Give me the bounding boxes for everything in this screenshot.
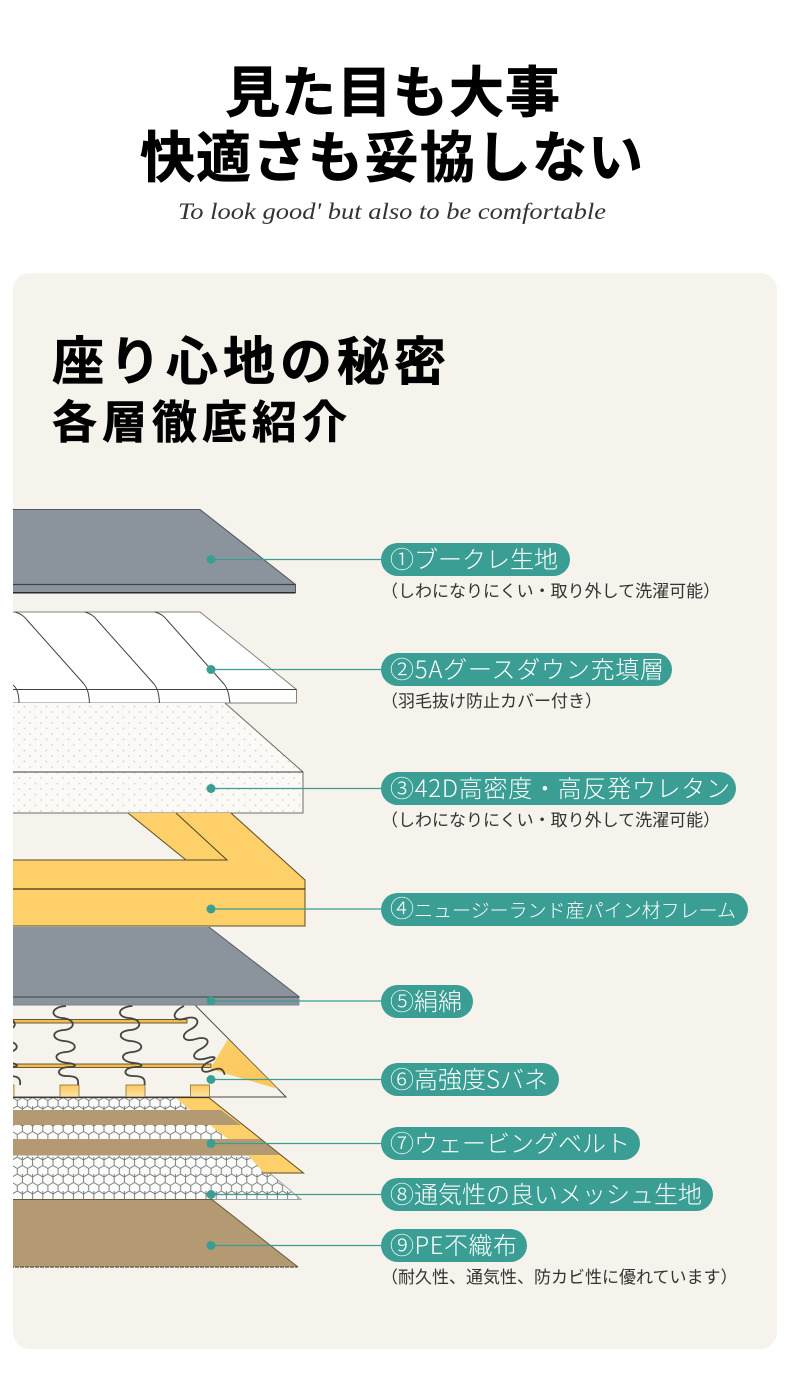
springs (0, 1001, 225, 1085)
callout 5 (206, 982, 473, 1018)
callout 9: ⑨PE不織布 (390, 1226, 517, 1261)
callout 5: ⑤絹綿 (390, 982, 462, 1017)
title (140, 62, 644, 189)
callout 2: （羽毛抜け防止カバー付き） (381, 692, 602, 711)
panel: layer breakdown (0, 273, 777, 1349)
callout 4 (206, 889, 748, 926)
callout 3: （しわになりにくい・取り外して洗濯可能） (381, 811, 720, 830)
exploded layer illustration (0, 510, 305, 1267)
panel heading: 座り心地の秘密 (52, 334, 451, 392)
callout 9 (206, 1226, 738, 1287)
callout 3: ③42D高密度・高反発ウレタン (390, 769, 730, 804)
subtitle: English script line: To look good' but also to be comfortable (178, 199, 606, 224)
callout 8 (206, 1175, 713, 1211)
title: 快適さも妥協しない (140, 127, 644, 189)
feet (5, 1085, 210, 1097)
panel heading: 各層徹底紹介 (52, 397, 352, 448)
callout 6 (206, 1060, 559, 1096)
panel heading (52, 334, 451, 448)
layer 1: boucle fabric (5, 510, 296, 593)
callout 7: ⑦ウェービングベルト (390, 1124, 630, 1159)
callout 2: ②5Aグースダウン充填層 (390, 650, 664, 685)
title: 見た目も大事 (225, 62, 561, 124)
callout 4: ④ニュージーランド産パイン材フレーム (390, 889, 736, 924)
callout 7 (206, 1124, 640, 1160)
layer 5: silk wadding (5, 927, 300, 1005)
layer 9: PE non-woven (5, 1200, 298, 1267)
layer 4: pine frame (5, 813, 305, 926)
yellow corner fold (210, 1039, 278, 1089)
callout 1: （しわになりにくい・取り外して洗濯可能） (381, 582, 720, 601)
layer 6: S springs (0, 1001, 286, 1097)
callout 3 (206, 769, 736, 830)
layer 8: breathable mesh (5, 1155, 301, 1200)
layer 2: goose down (5, 612, 296, 703)
callout 6: ⑥高強度Sバネ (390, 1060, 548, 1095)
spring support bars (5, 1020, 211, 1068)
callout 1: ①ブークレ生地 (390, 540, 558, 575)
layer 7: webbing belts (5, 1097, 304, 1173)
callout 2 (206, 650, 672, 711)
callout 9: （耐久性、通気性、防カビ性に優れています） (381, 1268, 738, 1287)
callout 1 (206, 540, 720, 601)
callout 8: ⑧通気性の良いメッシュ生地 (390, 1175, 702, 1210)
layer 3: high density urethane (5, 703, 303, 813)
